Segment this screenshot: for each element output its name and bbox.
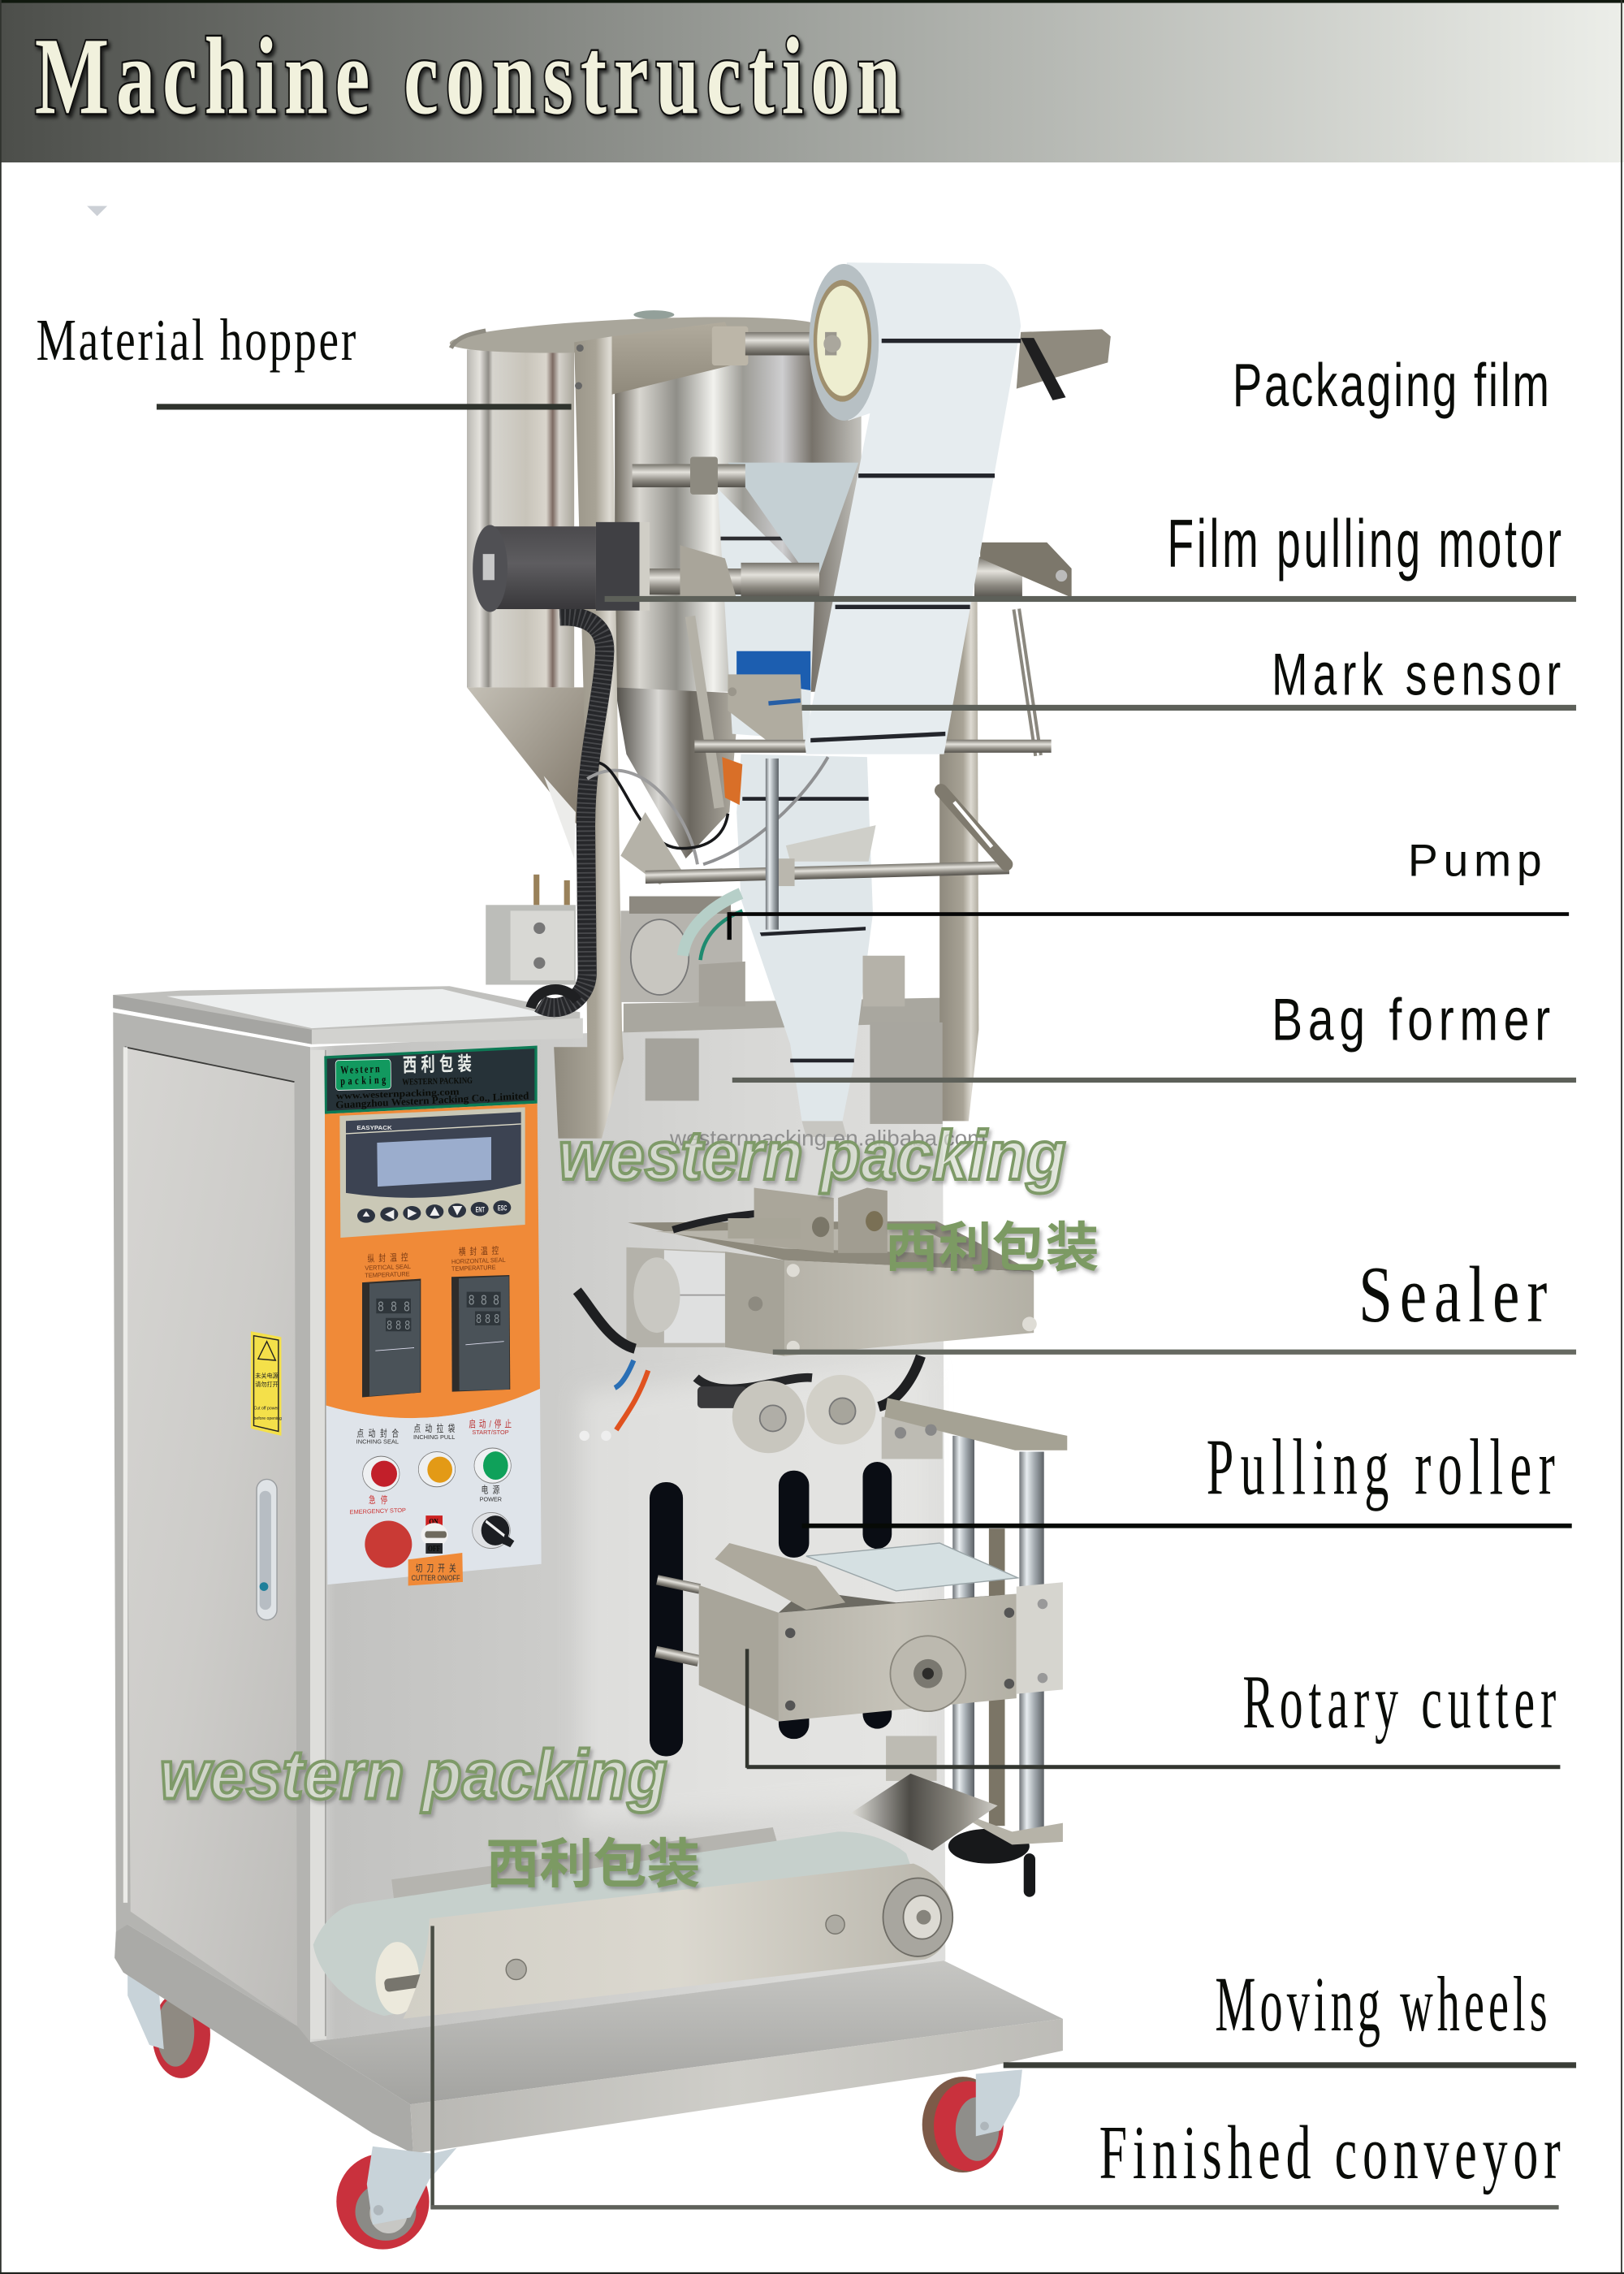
lower former film (736, 754, 873, 1137)
back film strip (718, 463, 858, 740)
rotary cutter (654, 1543, 1063, 1722)
orange panel (325, 1104, 540, 1418)
material hopper (449, 310, 862, 858)
cutter toggle switch: OFF (428, 1544, 441, 1553)
push buttons: 启动/停止 (469, 1418, 512, 1430)
watermark english lower: western packing (159, 1736, 667, 1814)
roller bar (650, 543, 1072, 599)
label: rotary cutter (745, 1649, 1561, 1769)
conveyor end roller (375, 1942, 446, 2014)
former collar (786, 825, 876, 862)
push buttons (350, 1418, 512, 1516)
vertical seal temperature controller: 888 (378, 1299, 410, 1316)
horizontal seal temperature controller (451, 1244, 510, 1392)
brand header: Guangzhou Western Packing Co., Limited (335, 1091, 529, 1111)
brand header: 西利包装 (403, 1053, 472, 1076)
horizontal seal temperature controller: 横封温控 (459, 1244, 499, 1258)
vertical seal temperature controller: TEMPERATURE (365, 1271, 410, 1279)
label: material hopper (37, 307, 572, 409)
base platform (310, 1961, 1063, 2154)
push buttons: EMERGENCY STOP (350, 1507, 406, 1516)
back-left wheel (127, 1973, 210, 2078)
label: pump: Pump (1408, 836, 1547, 886)
push buttons: 急停 (369, 1494, 387, 1506)
right frame column (939, 602, 978, 1121)
slanted bracket (690, 616, 719, 808)
cabinet side panel (113, 1012, 310, 2045)
sealer hoses (577, 1290, 921, 1430)
display unit (339, 1107, 525, 1238)
green hose (683, 893, 741, 956)
watermark english upper: western packing (559, 1117, 1065, 1195)
sealer blocks (728, 1187, 888, 1253)
upper arm and roll shaft (575, 322, 823, 395)
horizontal seal temperature controller: 888 (476, 1313, 499, 1328)
label: mark sensor (802, 641, 1576, 711)
vertical seal temperature controller: VERTICAL SEAL (365, 1264, 411, 1272)
cabinet front panel (310, 1015, 945, 2042)
brand header: Western (340, 1062, 380, 1076)
warning label: Cut off power (253, 1407, 279, 1412)
horizontal rod lower (646, 861, 1009, 884)
title banner (0, 0, 1624, 162)
push buttons: 点动封合 (356, 1427, 399, 1439)
brand header: WESTERN PACKING (402, 1076, 473, 1087)
brand header: www.westernpacking.com (336, 1087, 460, 1102)
bottom block (943, 1805, 1063, 1844)
discharge chute (851, 1774, 998, 1851)
rod clamp (766, 858, 795, 886)
push buttons: START/STOP (472, 1429, 509, 1436)
mark sensor (728, 651, 810, 740)
label: pump (728, 836, 1569, 940)
upper guide rod (633, 456, 745, 495)
lower bracket (886, 1736, 937, 1781)
slanted link (941, 790, 1006, 864)
emergency stop button (365, 1521, 412, 1567)
push buttons: 电源 (482, 1484, 500, 1496)
conveyor belt (313, 1831, 928, 2016)
ledge block (646, 1039, 699, 1100)
white button panel (326, 1389, 542, 1584)
warning label: before opening (253, 1416, 282, 1421)
display unit: EASYPACK (356, 1125, 392, 1131)
label: moving wheels (1004, 1961, 1576, 2068)
cutter toggle switch: CUTTER ON/OFF (412, 1574, 460, 1582)
label: pulling roller (802, 1423, 1572, 1528)
small triangle mark (87, 206, 107, 216)
frame plate (554, 336, 624, 1139)
label: film pulling motor (605, 505, 1576, 602)
display unit: ENT (476, 1205, 485, 1214)
horizontal seal temperature controller: HORIZONTAL SEAL (451, 1257, 506, 1265)
label: bag former (732, 986, 1576, 1083)
orange sensor (722, 757, 742, 805)
push buttons: INCHING PULL (413, 1434, 456, 1441)
front-left wheel (336, 2146, 456, 2250)
push buttons: POWER (480, 1497, 502, 1503)
conveyor side plate (403, 1864, 953, 2019)
side hanger bar (1017, 609, 1039, 755)
push buttons: INCHING SEAL (356, 1439, 399, 1446)
label: sealer: Sealer (1358, 1251, 1554, 1339)
faint website text: westernpacking.en.alibaba.com (669, 1126, 986, 1151)
guide rails (952, 1436, 1044, 1836)
machine base skirt (114, 1925, 413, 2154)
door lock handle (257, 1479, 277, 1620)
machine illustration (113, 262, 1111, 2250)
warning label (251, 1331, 282, 1436)
right film arm (1017, 329, 1111, 400)
warning label: 未关电源 (255, 1372, 279, 1379)
cutter toggle switch: 切刀开关 (416, 1563, 456, 1574)
slide slots (650, 1462, 892, 1756)
conveyor back plate (391, 1827, 779, 1903)
adjusting hand wheel (948, 1829, 1035, 1897)
cutter toggle switch: ON (429, 1517, 438, 1526)
label: sealer (773, 1251, 1576, 1355)
title: Machine construction (35, 15, 908, 137)
brand header (324, 1046, 538, 1114)
horizontal seal temperature controller: TEMPERATURE (451, 1265, 496, 1273)
display unit: ESC (498, 1204, 507, 1213)
watermark chinese upper: 西利包装 (884, 1218, 1099, 1278)
pump (486, 812, 905, 1008)
stand bracket (882, 1398, 1067, 1459)
vertical seal temperature controller (362, 1252, 421, 1398)
push buttons: 点动拉袋 (413, 1422, 456, 1434)
label: material hopper: Material hopper (37, 307, 358, 373)
packaging film roll (805, 262, 1021, 754)
film pulling motor (473, 522, 650, 612)
vertical rod (766, 759, 779, 930)
black corrugated hose (539, 616, 605, 1008)
middle rod (694, 740, 1052, 753)
back-right wheel (922, 2069, 1022, 2172)
control panel (324, 1046, 542, 1585)
watermark chinese lower: 西利包装 (486, 1835, 700, 1895)
cables (587, 757, 828, 864)
sealer (626, 1187, 1037, 1356)
cutter toggle switch (408, 1515, 463, 1585)
vertical seal temperature controller: 纵封温控 (367, 1252, 408, 1265)
pulling rollers (579, 1375, 876, 1453)
label: finished conveyor (430, 1926, 1566, 2210)
hopper lid (449, 310, 821, 359)
power selector knob (473, 1512, 514, 1549)
machine top table (113, 986, 943, 1044)
brand header: packing (340, 1073, 386, 1087)
horizontal seal temperature controller: 888 (469, 1293, 499, 1309)
warning label: 请勿打开 (255, 1381, 279, 1388)
vertical seal temperature controller: 888 (387, 1319, 410, 1334)
